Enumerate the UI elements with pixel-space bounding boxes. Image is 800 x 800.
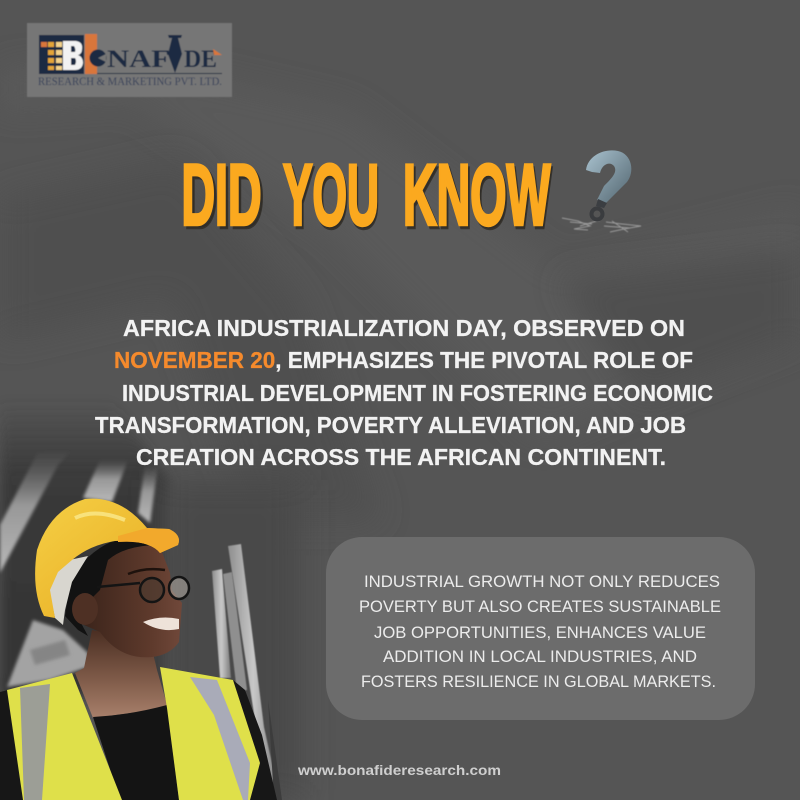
title: DID [184,150,264,246]
hair [65,539,160,636]
title: YOU [285,150,380,246]
title [182,148,552,246]
left reflective stripe [20,684,50,800]
title: KNOW [405,150,552,246]
logo plate [27,23,232,97]
title: YOU [283,148,379,244]
background chimneys [0,450,282,800]
safety vest left [7,673,122,800]
shirt and sleeves [0,680,277,800]
neck and chest [75,630,168,718]
panel text: POVERTY BUT ALSO CREATES SUSTAINABLE [359,597,721,616]
brow [128,569,165,574]
photo: woman in hard hat [0,499,277,800]
logo tagline: RESEARCH & MARKETING PVT. LTD. [38,76,222,88]
logo wordmark [90,35,222,74]
website url: www.bonafideresearch.com [297,762,501,778]
title: DID [182,148,262,244]
logo [27,23,232,97]
main statement: AFRICA INDUSTRIALIZATION DAY, OBSERVED ON [123,315,685,341]
face [80,543,182,657]
safety vest right [160,667,260,800]
smile [143,618,179,630]
hard hat brim [118,528,179,553]
panel text: FOSTERS RESILIENCE IN GLOBAL MARKETS. [361,672,716,691]
title: KNOW [403,148,551,244]
icon: question mark [562,150,641,232]
glasses [97,577,189,602]
hard hat [35,499,179,618]
logo pen nib [168,35,182,73]
panel text: INDUSTRIAL GROWTH NOT ONLY REDUCES [364,572,720,591]
logo wordmark: DE [184,46,217,73]
hard hat highlight [75,513,125,520]
panel: growth note [326,537,755,720]
highlighted date line: NOVEMBER 20, EMPHASIZES THE PIVOTAL ROLE OF [114,347,693,373]
main statement: TRANSFORMATION, POVERTY ALLEVIATION, AND JOB [95,412,686,438]
panel text [359,572,721,691]
panel text: JOB OPPORTUNITIES, ENHANCES VALUE [374,623,706,642]
main statement [95,315,713,470]
right reflective stripe [190,677,250,800]
main statement: CREATION ACROSS THE AFRICAN CONTINENT. [136,444,666,470]
logo wordmark: NAF [107,46,170,73]
black shirt [93,705,179,800]
helmet liner [49,556,88,625]
panel text: ADDITION IN LOCAL INDUSTRIES, AND [383,647,697,666]
main statement: INDUSTRIAL DEVELOPMENT IN FOSTERING ECONOMIC [122,380,713,406]
logo mark [39,34,97,74]
ear [72,593,98,625]
logo letter B [63,41,83,70]
